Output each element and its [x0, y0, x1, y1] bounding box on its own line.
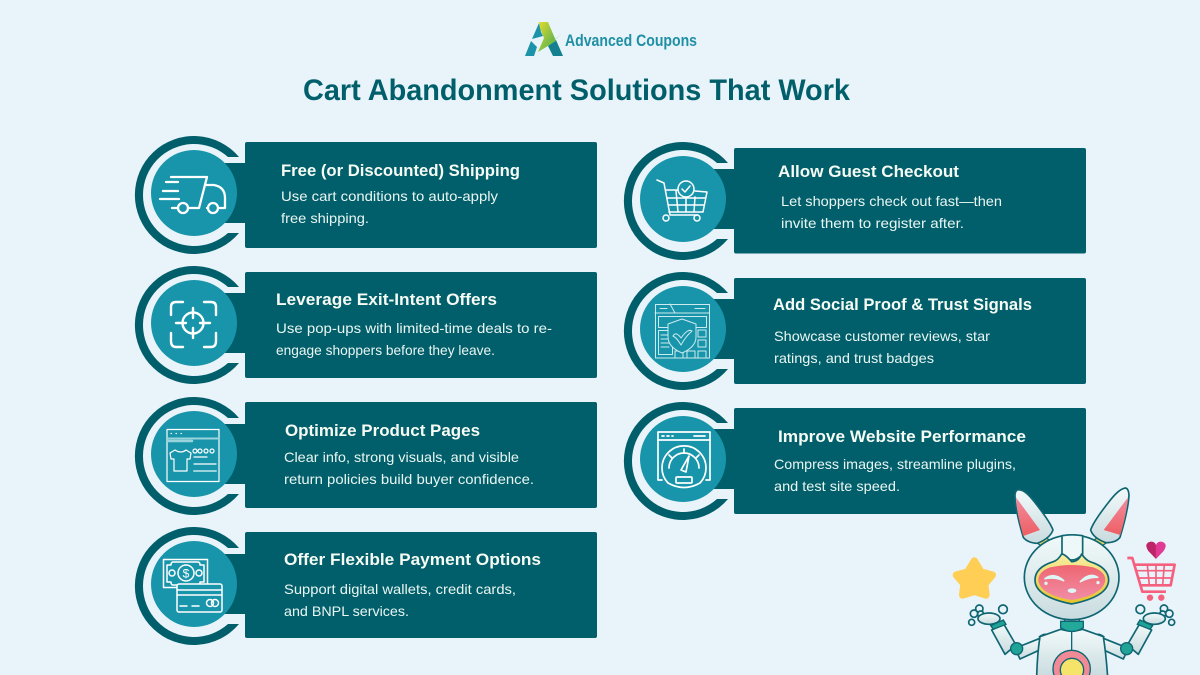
ring [135, 136, 239, 254]
card [734, 148, 1086, 254]
badge [640, 286, 726, 372]
body text: Compress images, streamline plugins, [774, 456, 1016, 472]
logo wordmark: Advanced Coupons [565, 31, 697, 50]
body text: Let shoppers check out fast—then [781, 193, 1002, 209]
connector [225, 293, 247, 353]
body text: invite them to register after. [781, 215, 964, 231]
connector [225, 163, 247, 223]
body text: engage shoppers before they leave. [276, 342, 495, 358]
ring [624, 402, 728, 520]
icon: shield on web page [655, 304, 710, 358]
icon: cash and card: $ [183, 566, 190, 580]
body [1037, 629, 1108, 675]
icon: speedometer browser [658, 432, 710, 488]
ring [624, 272, 728, 390]
card [245, 142, 597, 248]
badge [640, 416, 726, 502]
body text: and BNPL services. [284, 603, 409, 619]
heading: Optimize Product Pages [285, 421, 480, 440]
left ear [1015, 490, 1053, 543]
panel: social proof [624, 272, 1086, 390]
card [245, 532, 597, 638]
card [245, 402, 597, 508]
icon: delivery truck [160, 177, 225, 213]
body text: Clear info, strong visuals, and visible [284, 449, 519, 465]
card [245, 272, 597, 378]
badge [151, 411, 237, 497]
heart [1146, 542, 1156, 559]
body text: and test site speed. [774, 478, 900, 494]
logo [525, 22, 697, 56]
body text: Use pop-ups with limited-time deals to re- [276, 320, 552, 336]
heading: Allow Guest Checkout [778, 162, 959, 181]
icon: cart with heart [1127, 542, 1175, 601]
body text: ratings, and trust badges [774, 350, 934, 366]
icon: yellow star [956, 561, 992, 595]
illustration: robot mascot [969, 488, 1175, 675]
body text [281, 188, 498, 226]
card [734, 408, 1086, 514]
connector [225, 424, 247, 484]
body text: return policies build buyer confidence. [284, 471, 534, 487]
eyes and mouth [1045, 576, 1064, 581]
badge [640, 156, 726, 242]
icon: shopping cart with check [657, 180, 707, 221]
badge [151, 150, 237, 236]
icon: cash and card [164, 560, 222, 612]
body text: Use cart conditions to auto-apply [281, 188, 498, 204]
body text [774, 328, 990, 366]
body text: Support digital wallets, credit cards, [284, 581, 516, 597]
heading: Add Social Proof & Trust Signals [773, 295, 1032, 314]
hands [969, 605, 1175, 625]
card [734, 278, 1086, 384]
title: Cart Abandonment Solutions That Work [303, 74, 850, 107]
logo mark [525, 22, 563, 56]
connector [714, 169, 736, 229]
head [1024, 535, 1119, 620]
body text: Showcase customer reviews, star [774, 328, 990, 344]
panel: guest checkout [624, 142, 1086, 260]
badge [151, 541, 237, 627]
panel: website performance [624, 402, 1086, 520]
arms [991, 620, 1153, 659]
face [1035, 554, 1109, 604]
heading: Free (or Discounted) Shipping [281, 161, 520, 180]
connector [714, 299, 736, 359]
body text [284, 449, 534, 487]
body text [284, 581, 516, 619]
heading: Improve Website Performance [778, 427, 1026, 446]
connector [714, 429, 736, 489]
neck and collar [1061, 604, 1083, 631]
head crest [1062, 535, 1083, 560]
panel: payment options [135, 527, 597, 645]
right ear [1091, 488, 1129, 543]
panel: exit-intent offers [135, 266, 597, 384]
badge [151, 280, 237, 366]
connector [225, 554, 247, 614]
body text [774, 456, 1016, 494]
ring [135, 527, 239, 645]
icon: target [171, 302, 216, 347]
body text [781, 193, 1002, 231]
ear connectors [1037, 536, 1049, 546]
heading: Leverage Exit-Intent Offers [276, 290, 497, 309]
panel: free shipping [135, 136, 597, 254]
ring [135, 397, 239, 515]
panel: product pages [135, 397, 597, 515]
ring [624, 142, 728, 260]
body text [276, 320, 552, 358]
heading: Offer Flexible Payment Options [284, 550, 541, 569]
icon: product page [167, 430, 219, 482]
ring [135, 266, 239, 384]
cart [1127, 558, 1175, 592]
body text: free shipping. [281, 210, 369, 226]
